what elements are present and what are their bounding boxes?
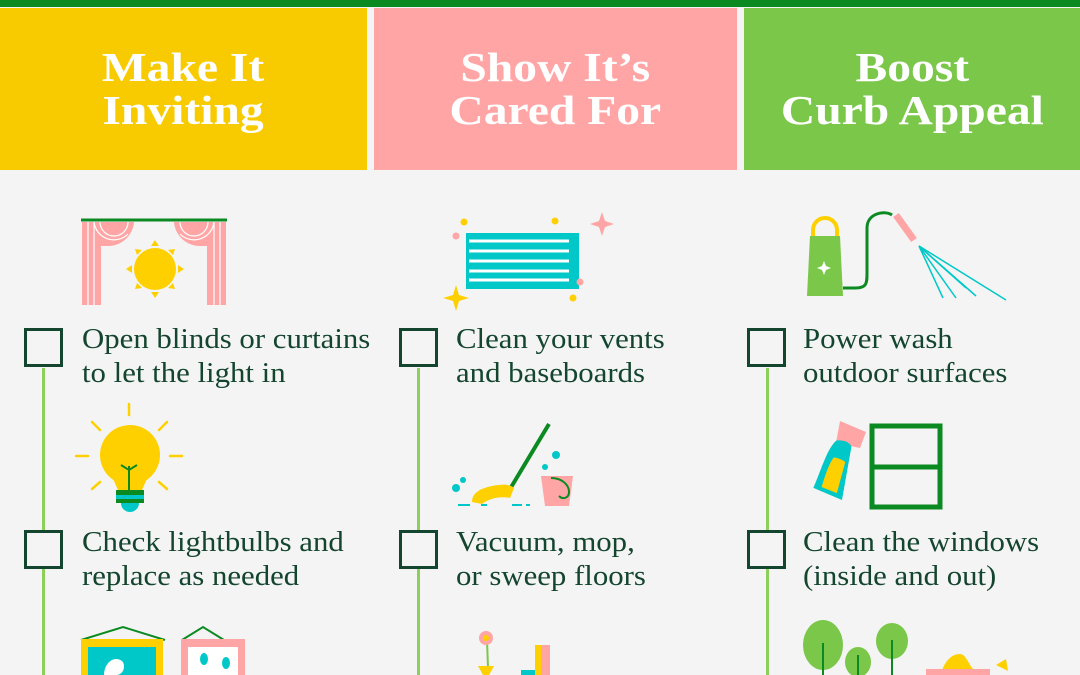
icon: vent with sparkles [443, 212, 614, 311]
checkbox 3b [747, 530, 786, 569]
text: windows [803, 527, 1039, 592]
heading: Show It's Cared For: Cared For [450, 87, 661, 133]
heading: Show It's Cared For: Show It’s [461, 44, 650, 90]
text: vents: Clean your vents [456, 324, 665, 355]
checkbox 2a [399, 328, 438, 367]
timeline line 3 [766, 368, 769, 675]
text: lightbulbs [82, 527, 344, 592]
icon: mop and bucket [452, 424, 573, 506]
text: power wash: Power wash [803, 324, 953, 355]
icon: trees and wheelbarrow [803, 620, 1008, 675]
top banner strip [0, 0, 1080, 7]
text: vents: and baseboards [456, 358, 645, 389]
icon: lightbulb [76, 404, 182, 512]
text: vacuum: or sweep floors [456, 561, 646, 592]
text: power wash [803, 324, 1007, 389]
checkbox 3a [747, 328, 786, 367]
text: windows: Clean the windows [803, 527, 1039, 558]
timeline line 1 [42, 368, 45, 675]
text: windows: (inside and out) [803, 561, 996, 592]
text: vacuum: Vacuum, mop, [456, 527, 635, 558]
text: open blinds [82, 324, 370, 389]
heading: Show It's Cared For [374, 8, 737, 170]
text: open blinds: to let the light in [82, 358, 286, 389]
heading: Make It Inviting [0, 8, 367, 170]
text: vents [456, 324, 665, 389]
timeline line 2 [417, 368, 420, 675]
text: open blinds: Open blinds or curtains [82, 324, 370, 355]
checkbox 2b [399, 530, 438, 569]
checkbox 1a [24, 328, 63, 367]
icon: picture frames [81, 627, 245, 675]
heading: Boost Curb Appeal: Curb Appeal [781, 87, 1043, 133]
heading: Make It Inviting: Make It [102, 44, 265, 90]
heading: Boost Curb Appeal [744, 8, 1080, 170]
text: vacuum [456, 527, 646, 592]
icon: curtains and sun [81, 220, 227, 305]
text: lightbulbs: Check lightbulbs and [82, 527, 344, 558]
heading: Boost Curb Appeal: Boost [855, 44, 969, 90]
text: lightbulbs: replace as needed [82, 561, 299, 592]
text: power wash: outdoor surfaces [803, 358, 1007, 389]
icon: flower and books [478, 631, 550, 675]
checkbox 1b [24, 530, 63, 569]
icon: spray bottle and window [812, 421, 940, 507]
icon: pressure washer [807, 213, 1006, 300]
heading: Make It Inviting: Inviting [103, 87, 264, 133]
